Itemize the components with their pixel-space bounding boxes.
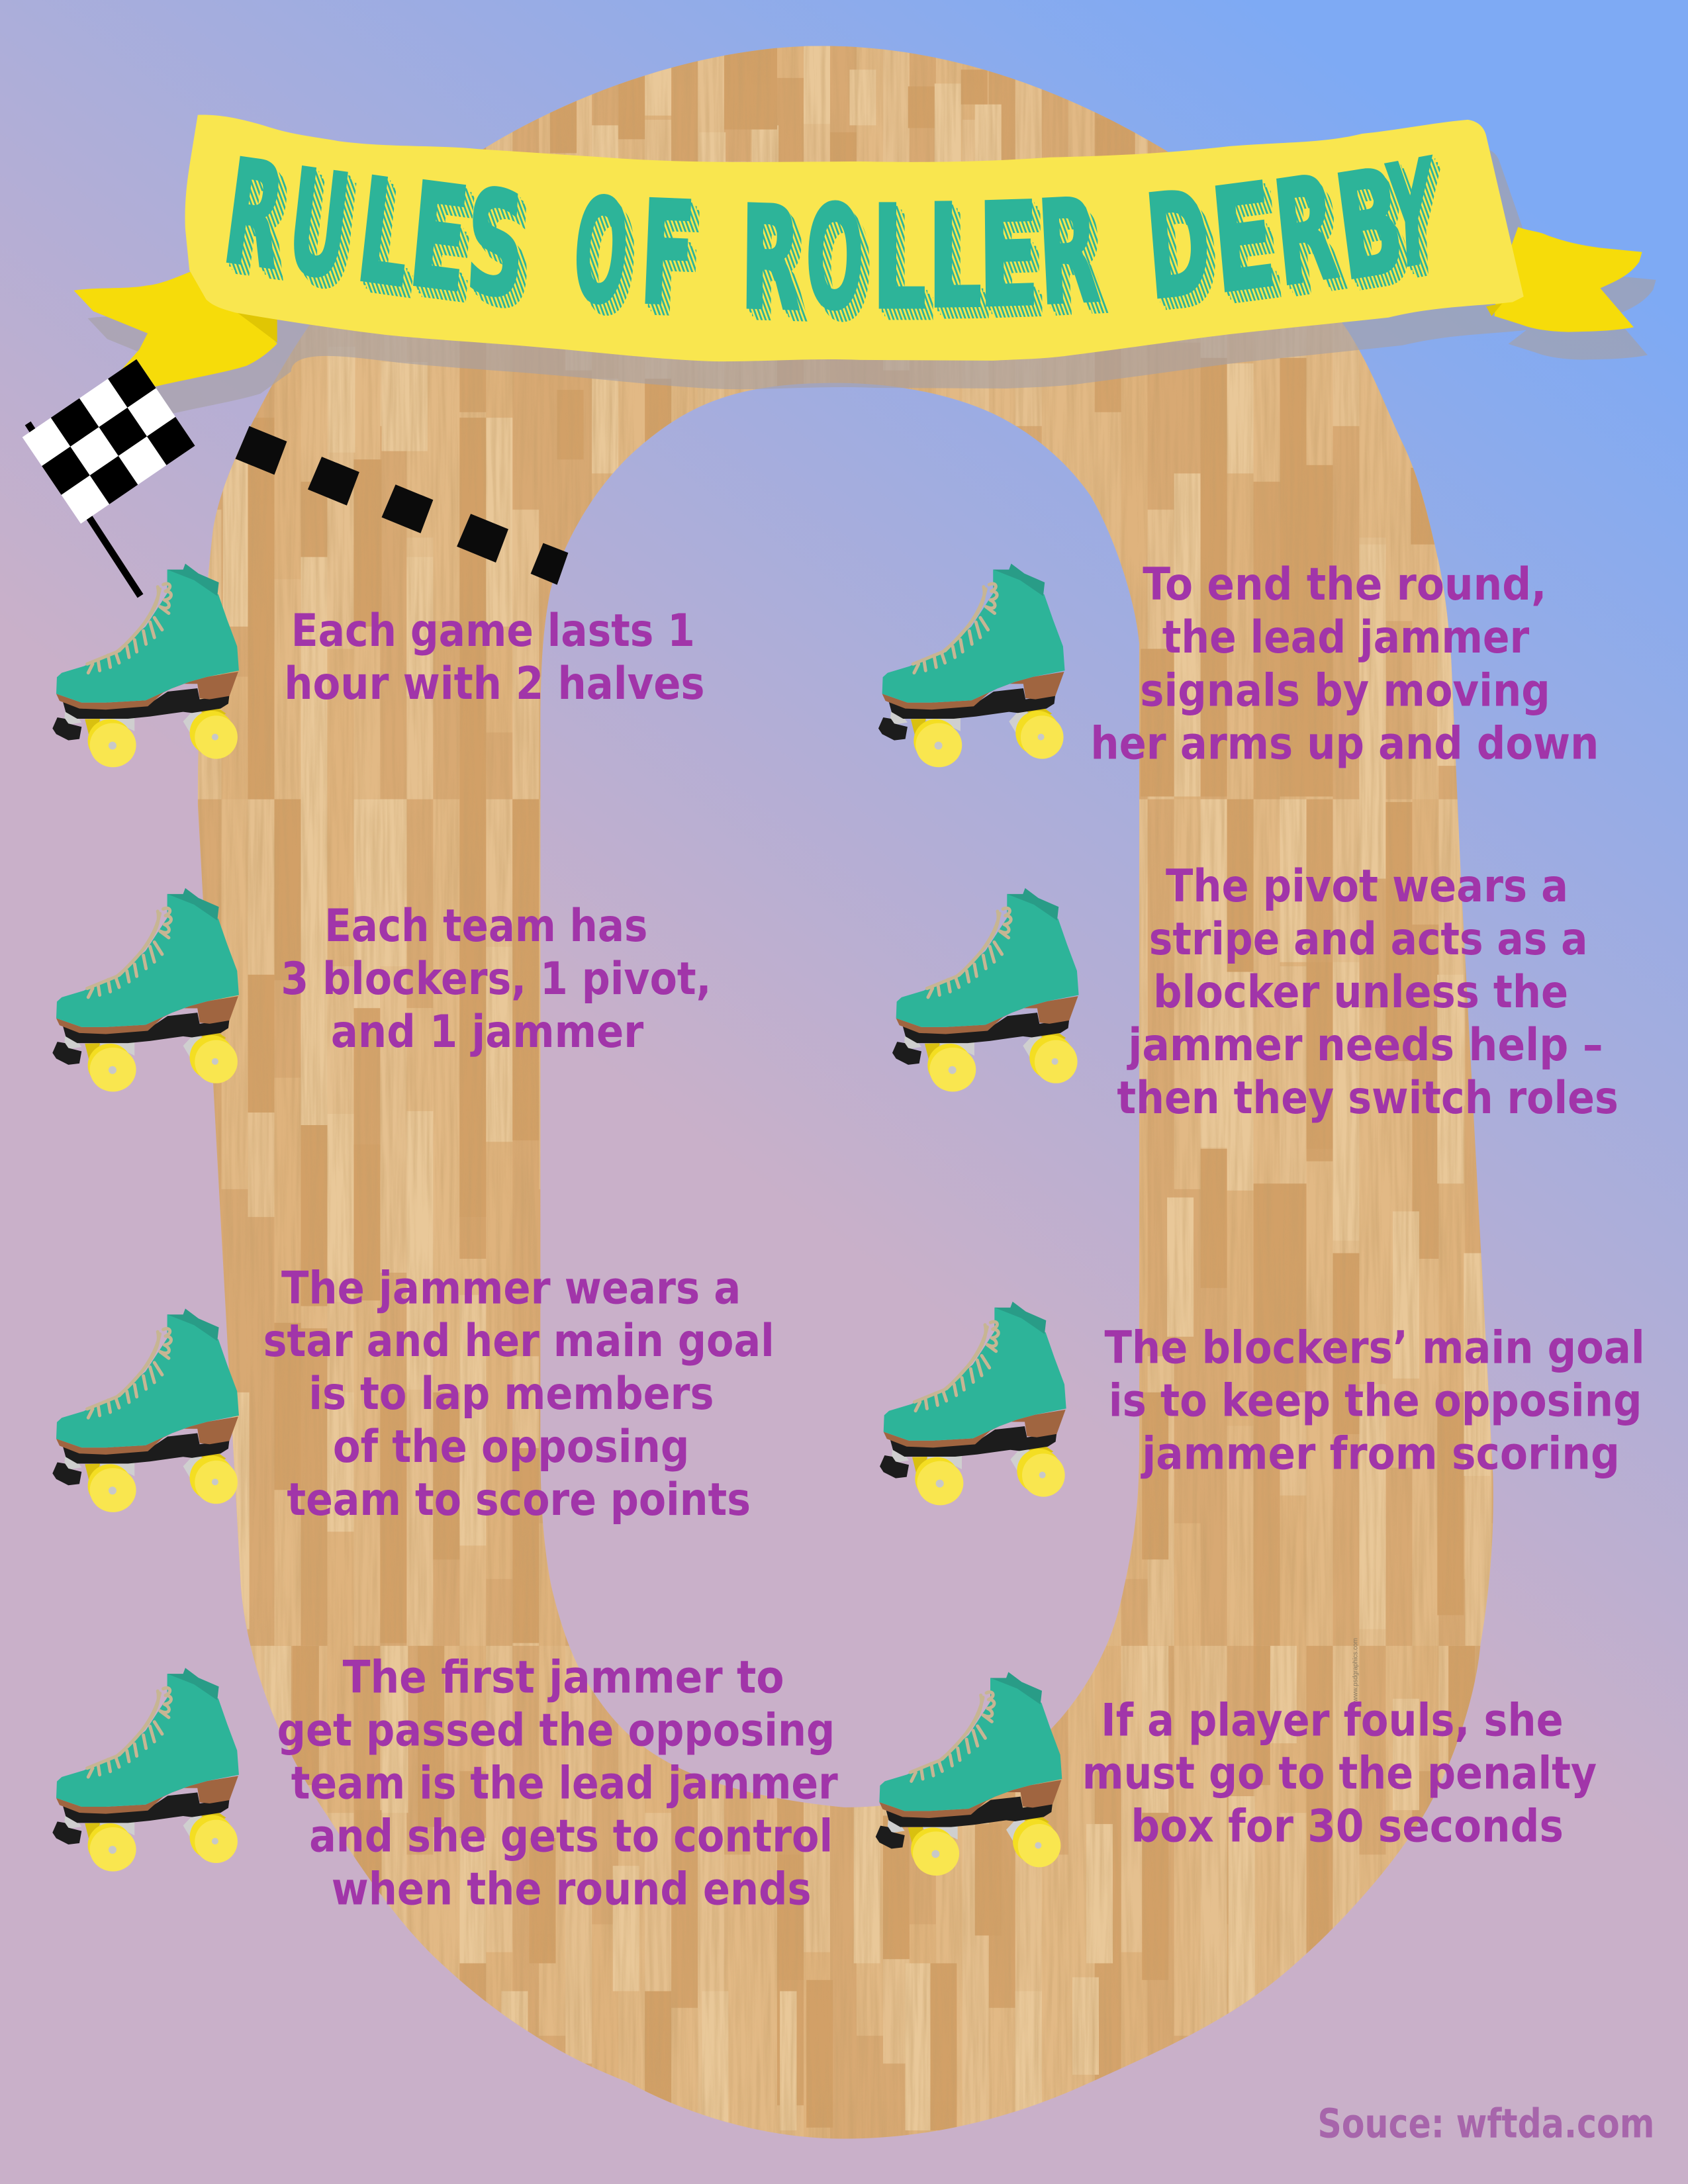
rule 6 text: blocker unless the <box>1153 966 1568 1018</box>
rule 8 text: must go to the penalty <box>1082 1747 1597 1799</box>
rule 3 text: is to lap members <box>308 1368 714 1420</box>
title: Rules of Roller Derby: L <box>872 175 927 342</box>
title: Rules of Roller Derby: B <box>1327 137 1412 314</box>
skate 8 <box>876 1672 1062 1876</box>
rule 2 text: 3 blockers, 1 pivot, <box>281 953 711 1005</box>
title: Rules of Roller Derby: F <box>637 170 698 339</box>
rule 4 text: get passed the opposing <box>277 1705 835 1756</box>
title: Rules of Roller Derby: O <box>568 166 633 338</box>
rule 2 text <box>281 900 711 1058</box>
rule 1 text: Each game lasts 1 <box>291 605 695 657</box>
title: Rules of Roller Derby <box>216 127 1439 343</box>
title: Rules of Roller Derby: S <box>463 158 529 331</box>
rule 3 text: of the opposing <box>333 1421 689 1473</box>
rule 7 text: is to keep the opposing <box>1109 1375 1642 1427</box>
title: Rules of Roller Derby: R <box>1034 168 1103 338</box>
rule 4 text <box>277 1652 838 1915</box>
title: Rules of Roller Derby: R <box>216 128 293 302</box>
skate 3 <box>52 1308 239 1512</box>
skate 1 <box>52 564 239 767</box>
banner folds <box>236 304 1502 343</box>
rule 8 text <box>1082 1695 1597 1852</box>
rule 4 text: The first jammer to <box>343 1652 784 1704</box>
title: Rules of Roller Derby: L <box>927 173 982 341</box>
rule 2 text: Each team has <box>324 900 647 952</box>
banner left tail <box>74 271 277 387</box>
skate 2 <box>52 888 239 1091</box>
rule 4 text: and she gets to control <box>309 1811 833 1862</box>
rule 2 text: and 1 jammer <box>331 1006 643 1058</box>
checkered flag <box>23 359 195 596</box>
rule 7 text <box>1104 1322 1645 1480</box>
title: Rules of Roller Derby: U <box>281 137 357 312</box>
rule 3 text: team to score points <box>287 1474 751 1525</box>
rule 3 text: star and her main goal <box>263 1315 774 1367</box>
dashed start line <box>236 426 568 585</box>
rule 4 text: team is the lead jammer <box>291 1758 838 1809</box>
rule 7 text: jammer from scoring <box>1141 1428 1620 1480</box>
texture credit: www.psdgraphics.com <box>1352 1638 1359 1702</box>
rule 6 text: jammer needs help – <box>1126 1019 1603 1071</box>
title: Rules of Roller Derby: R <box>1267 144 1344 320</box>
title: Rules of Roller Derby: E <box>1205 151 1282 326</box>
title: Rules of Roller Derby: R <box>739 175 802 343</box>
title: Rules of Roller Derby: L <box>350 146 418 320</box>
rule 6 text: The pivot wears a <box>1166 860 1568 912</box>
rule 5 text: signals by moving <box>1140 665 1550 717</box>
rule 5 text: To end the round, <box>1143 559 1546 610</box>
rule 6 text: then they switch roles <box>1117 1072 1618 1124</box>
title banner <box>74 111 1642 390</box>
banner right tail <box>1495 227 1642 332</box>
rule 5 text: her arms up and down <box>1090 718 1599 770</box>
rule 8 text: box for 30 seconds <box>1131 1800 1564 1852</box>
rule 8 text: If a player fouls, she <box>1101 1695 1564 1747</box>
rule 1 text: hour with 2 halves <box>284 658 705 709</box>
skate 7 <box>880 1302 1066 1505</box>
title: Rules of Roller Derby: E <box>403 151 475 325</box>
title: Rules of Roller Derby: D <box>1141 159 1217 333</box>
title: Rules of Roller Derby: Y <box>1383 127 1439 303</box>
rule 4 text: when the round ends <box>332 1864 812 1915</box>
flag cloth <box>23 359 195 523</box>
rule 3 text: The jammer wears a <box>281 1262 741 1314</box>
title hatched shadow <box>229 158 1441 322</box>
rule 1 text <box>284 605 705 709</box>
skate 4 <box>52 1668 239 1872</box>
flag pole <box>28 424 140 596</box>
rule 6 text: stripe and acts as a <box>1149 913 1588 965</box>
rule 5 text <box>1090 559 1599 770</box>
rule 5 text: the lead jammer <box>1162 612 1529 663</box>
skate 5 <box>878 564 1065 767</box>
wood roller derby track <box>181 28 1518 2158</box>
title: Rules of Roller Derby: E <box>977 171 1040 340</box>
banner main <box>185 114 1524 361</box>
rule 7 text: The blockers’ main goal <box>1104 1322 1645 1374</box>
rule 6 text <box>1117 860 1618 1124</box>
skate 6 <box>892 888 1079 1091</box>
ribbon shadow <box>88 143 1656 414</box>
rule 3 text <box>263 1262 774 1525</box>
title: Rules of Roller Derby: O <box>805 175 865 343</box>
